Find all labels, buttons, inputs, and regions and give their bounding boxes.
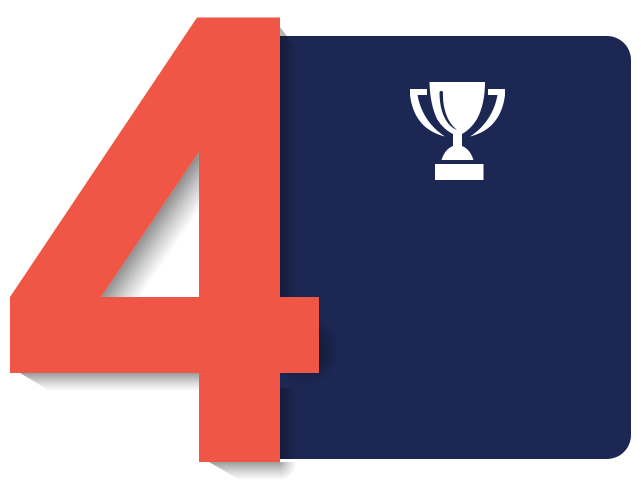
trophy right handle xyxy=(470,89,505,136)
trophy base xyxy=(435,164,484,180)
panel: navy rounded card xyxy=(270,36,631,459)
icon: trophy xyxy=(410,82,505,180)
shadow: cast by the numeral xyxy=(20,27,336,480)
numeral 4 xyxy=(10,18,319,462)
trophy cup xyxy=(430,82,485,160)
trophy left handle xyxy=(410,89,445,136)
trophy highlight xyxy=(440,91,457,130)
